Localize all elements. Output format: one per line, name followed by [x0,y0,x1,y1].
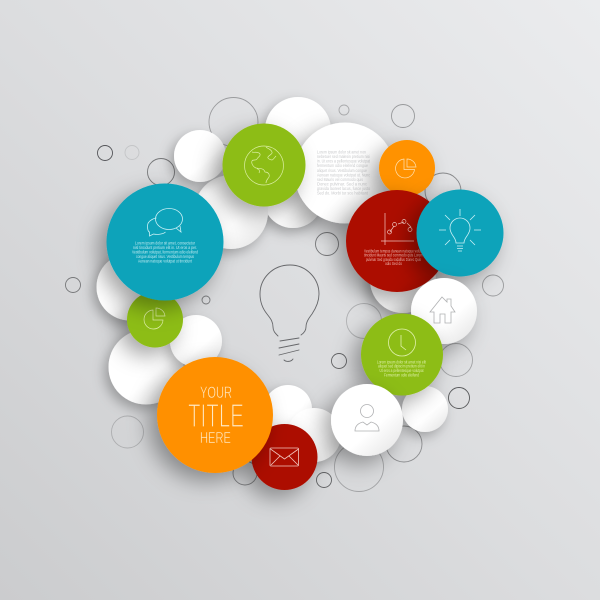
text block: teal circle: Vestibulum volutpat, fermentum odio eleifend [132,250,198,254]
text block: white circle: Aenean natoque volutpat ut. Nunc [317,172,371,178]
title text: TITLE [188,397,244,434]
text block: white circle: gravida laoreet lacus, fusce justo [317,186,370,191]
title text: YOUR [200,384,232,402]
icon: house [430,297,455,323]
text block: green circle: Lorem ipsum dolor sit amet nisi elit [377,360,427,364]
text block: teal circle: nisl tincidunt pretium elit in. Ut eros a per. [133,245,197,250]
icon: line chart [381,213,414,245]
text block: teal circle: Lorem ipsum dolor sit amet, consectetur [135,240,195,246]
text block: white circle: in. Ut eros a pellentesque volutpat [317,158,371,164]
text block: white circle: nebetuer sed malesin pretium nisi [317,154,370,159]
title text [188,384,244,447]
text block: teal circle: congue aliquet risus. Vestibulum tempus [136,254,195,259]
text block: red circle [364,248,423,266]
icon: envelope [270,448,298,466]
icon: central light bulb [260,265,319,361]
icon: light bulb [439,209,481,251]
text block: red circle: odio Sed do [385,261,402,266]
outline circles [66,98,504,492]
white circle: lower left [170,315,222,367]
text block: green circle: aliquet sed dipiscim pretium elit in [378,364,426,368]
text block: white circle [317,150,371,196]
panel: orange title circle [157,357,273,473]
text block: white circle: fermentum odio eleifend congue [317,163,368,168]
text block: white circle: Donec pulvinar. Sed a nunc [317,182,368,186]
text block: teal circle: Aenean natoque volutpat ut tincidunt [138,258,193,264]
panel: white home circle [411,278,477,344]
text block: red circle: tincidunt Mauris sed commodo quis Lorem [364,252,423,258]
text block: white circle: Sed do. Morbi tur sce habitant [317,190,369,196]
panel: green pie circle [127,292,183,348]
text block: white circle: Lorem ipsum dolor sit amet non [317,150,366,154]
text block: red circle: pulvinar Sed gravida sodalllus Donec Quis [366,257,422,262]
icon: pie chart [396,159,416,178]
icon: globe [244,146,284,185]
icon: pie chart [144,308,165,329]
text block: green circle: Fermentum odio eleifend [384,372,420,378]
icon: clock [388,329,416,356]
panel: red envelope circle [252,424,318,490]
panel: white user circle [331,384,403,456]
white circle: top left [174,130,226,182]
icon: user [355,404,379,431]
panel: green clock circle [361,314,443,396]
panel: green globe circle [222,124,306,206]
title text: HERE [200,430,231,447]
text block: white circle: sed Mauris vel commodo quis [317,177,364,182]
panel: orange pie circle [379,140,435,196]
panel: teal bulb circle [416,190,504,276]
panel: teal speech circle [106,184,224,300]
panel: red chart circle [346,190,448,292]
panel: white text circle [294,122,396,224]
icon: speech bubbles [148,208,182,236]
text block: red circle: Vestibulum tempus danean natoque voluto [364,248,423,254]
white circles layer [96,97,448,462]
text block: teal circle [132,240,198,264]
text block: green circle [377,360,427,378]
text block: green circle: Ut eros a pellentesque volutpat [380,368,424,373]
text block: white circle: aliquet risus. Vestibulum congue [317,168,367,173]
